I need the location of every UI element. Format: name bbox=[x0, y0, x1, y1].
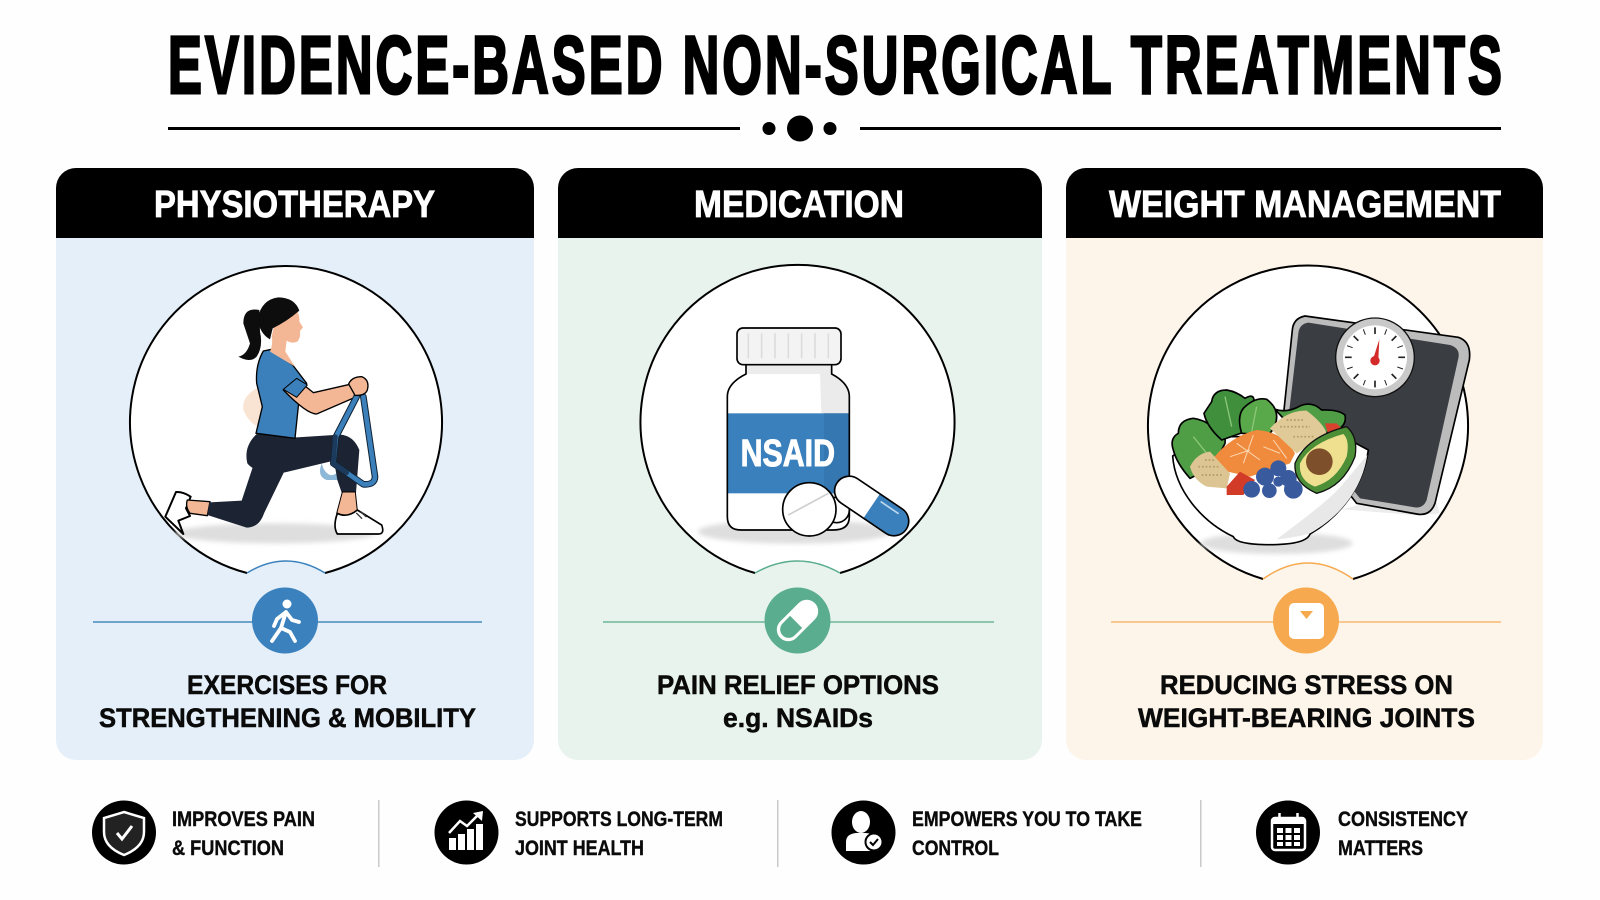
blueberries bbox=[1243, 460, 1303, 499]
avocado bbox=[1295, 427, 1356, 493]
caption: weight management: REDUCING STRESS ON bbox=[1160, 670, 1453, 700]
benefit: empowers you to take control: EMPOWERS YOU TO TAKE bbox=[912, 807, 1142, 831]
divider with capsule icon bbox=[603, 588, 994, 654]
divider with walking icon bbox=[93, 588, 482, 654]
icon: small scale bbox=[1289, 603, 1324, 639]
salmon bbox=[1213, 430, 1295, 477]
grains bbox=[1190, 452, 1230, 488]
panel header: physiotherapy bbox=[56, 168, 534, 238]
benefit: improves pain and function: IMPROVES PAIN bbox=[172, 807, 315, 831]
salad leaves bbox=[1172, 390, 1345, 478]
illustration: food bowl and scale bbox=[1172, 316, 1470, 554]
illustration: NSAID bottle and pills bbox=[698, 328, 914, 544]
icon: person with check bbox=[846, 811, 882, 851]
icon: shield with check bbox=[104, 812, 144, 855]
benefit: empowers you to take control bbox=[832, 800, 1142, 864]
benefit: empowers you to take control: CONTROL bbox=[912, 836, 999, 860]
icon: capsule bbox=[772, 595, 823, 646]
benefit: supports long-term joint health: SUPPORTS LONG-TERM bbox=[515, 807, 723, 831]
divider with scale icon bbox=[1111, 588, 1501, 654]
caption: weight management: WEIGHT-BEARING JOINTS bbox=[1138, 703, 1475, 733]
bathroom scale bbox=[1284, 316, 1470, 515]
panel: weight management bbox=[1066, 168, 1543, 760]
title divider with dots bbox=[168, 116, 1501, 142]
icon: rising bars with arrow bbox=[449, 811, 483, 850]
panel header: medication bbox=[558, 168, 1042, 238]
caption: physiotherapy bbox=[99, 670, 476, 733]
benefit: supports long-term joint health bbox=[434, 800, 723, 864]
icon: walking person bbox=[272, 600, 299, 641]
panel header: medication: MEDICATION bbox=[694, 184, 904, 226]
bowl body bbox=[1173, 437, 1368, 545]
benefit: consistency matters bbox=[1256, 800, 1468, 864]
panel: physiotherapy bbox=[56, 168, 534, 760]
benefit: consistency matters: MATTERS bbox=[1338, 836, 1423, 860]
caption: medication: PAIN RELIEF OPTIONS bbox=[657, 670, 939, 700]
caption: physiotherapy: EXERCISES FOR bbox=[187, 670, 387, 700]
bottle label text: NSAID bbox=[741, 433, 835, 475]
panel: medication bbox=[558, 168, 1042, 760]
caption: medication: e.g. NSAIDs bbox=[723, 703, 873, 733]
panel header: weight management: WEIGHT MANAGEMENT bbox=[1109, 184, 1501, 226]
caption: physiotherapy: STRENGTHENING & MOBILITY bbox=[99, 703, 476, 733]
illustration: woman kneeling with resistance band bbox=[165, 297, 383, 543]
panel header: physiotherapy: PHYSIOTHERAPY bbox=[154, 184, 435, 226]
illustration circle bbox=[1148, 265, 1468, 579]
capsule bbox=[829, 471, 914, 541]
benefit: consistency matters: CONSISTENCY bbox=[1338, 807, 1468, 831]
benefit: improves pain and function bbox=[92, 800, 315, 864]
benefit: supports long-term joint health: JOINT HEALTH bbox=[515, 836, 644, 860]
illustration circle bbox=[130, 266, 442, 573]
caption: weight management bbox=[1138, 670, 1475, 733]
illustration circle bbox=[640, 265, 954, 573]
caption: medication bbox=[657, 670, 939, 733]
icon: calendar bbox=[1272, 813, 1305, 850]
benefit: improves pain and function: & FUNCTION bbox=[172, 836, 284, 860]
panel header: weight management bbox=[1066, 168, 1543, 238]
